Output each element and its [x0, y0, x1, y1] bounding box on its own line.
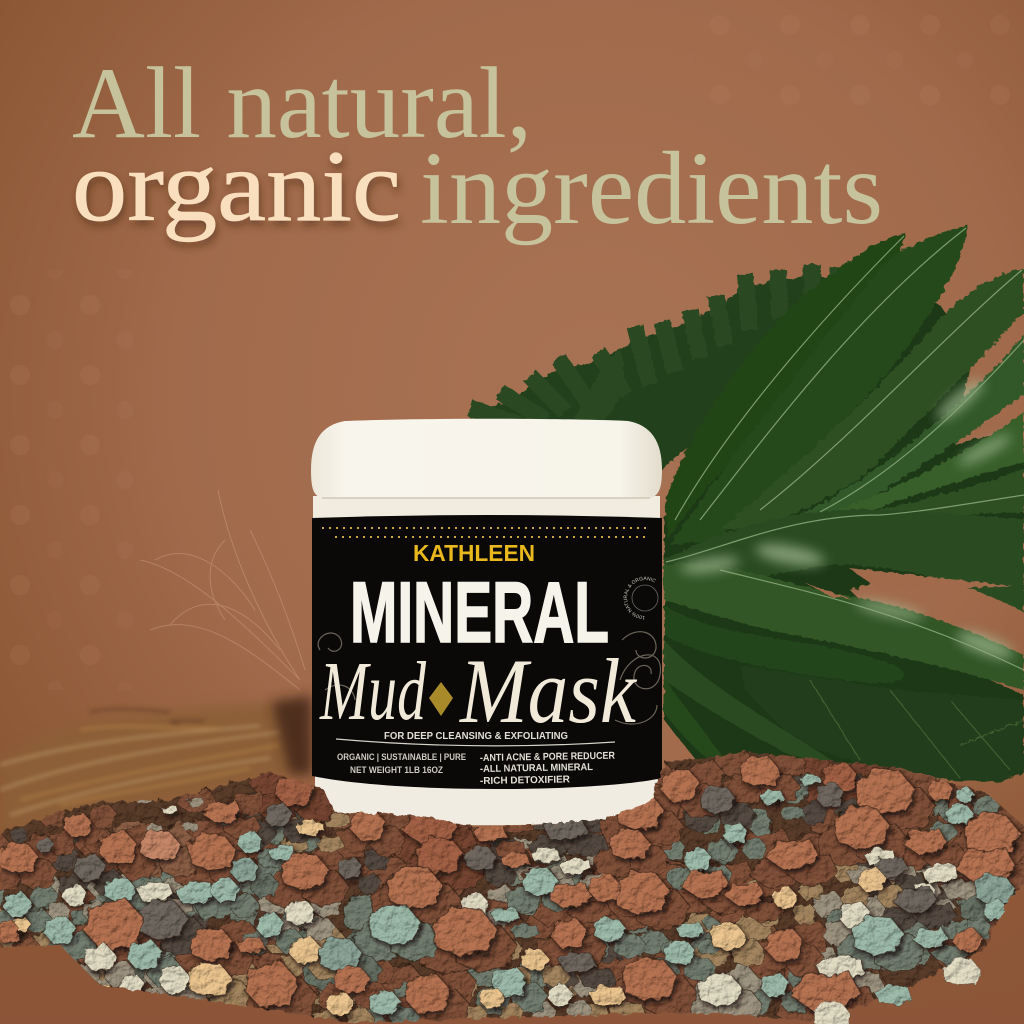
left details: ORGANIC | SUSTAINABLE | PURE	[337, 752, 466, 763]
jar lid	[311, 419, 662, 498]
jar base	[315, 770, 658, 825]
back frond lower	[740, 665, 1024, 782]
leaf backing	[664, 292, 1024, 782]
loose stones on the ground	[813, 957, 981, 1024]
leaflets	[575, 225, 1024, 780]
mineral rock pile	[0, 746, 1024, 1024]
label: -RICH DETOXIFIER	[480, 774, 571, 787]
pampas grass	[0, 695, 312, 835]
jar	[311, 418, 662, 826]
subtitle: FOR DEEP CLEANSING & EXFOLIATING	[384, 730, 568, 742]
dried plant line drawing	[140, 490, 305, 690]
leaf highlights	[679, 375, 1016, 664]
title line 2 end: ingredients	[420, 131, 883, 246]
leaf veins	[666, 228, 1024, 670]
title line 1: All natural,	[72, 47, 532, 160]
script word Mask: Mask	[458, 640, 638, 742]
label: NET WEIGHT 1LB 16OZ	[350, 765, 443, 776]
jar neck	[313, 496, 660, 522]
organic seal: 100% NATURAL & ORGANIC	[624, 576, 656, 620]
palm leaf	[468, 225, 1024, 782]
gold diamond	[429, 682, 453, 716]
label: -ALL NATURAL MINERAL	[480, 762, 593, 775]
script word Mud: Mud	[319, 645, 427, 738]
clipped dense heap	[0, 746, 1024, 1024]
swirls	[318, 632, 660, 724]
back frond upper	[468, 264, 880, 470]
label	[312, 515, 662, 789]
gold dots	[322, 528, 650, 537]
title	[72, 47, 883, 246]
right details: -ANTI ACNE & PORE REDUCER	[480, 751, 616, 764]
product name: MINERAL	[350, 565, 609, 661]
title highlight: organic: organic	[72, 130, 401, 243]
brand: KATHLEEN	[413, 540, 535, 566]
